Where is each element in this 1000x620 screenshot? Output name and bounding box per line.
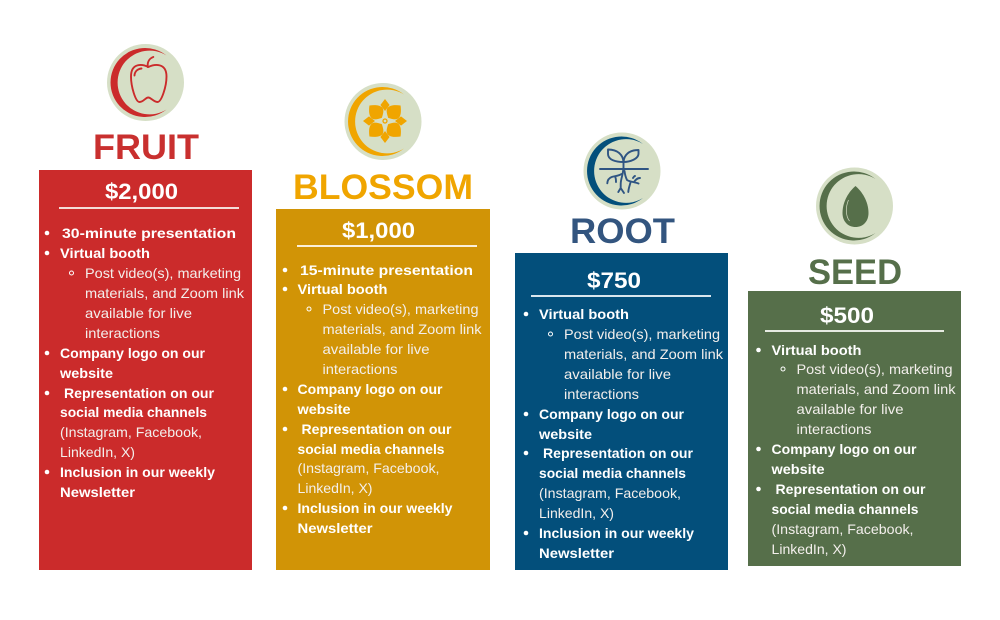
benefits list: Representation on our [543,445,694,461]
icon: root [584,132,660,210]
tier: seed [748,168,961,566]
benefits list: available for live [85,305,192,321]
price: $2,000 [105,179,178,204]
benefits list: website [770,461,825,477]
benefits list: social media channels [60,404,207,420]
benefits list: Newsletter [539,545,615,561]
benefits list: (Instagram, Facebook, [539,485,681,501]
icon: apple [107,44,184,121]
benefits list: (Instagram, Facebook, [60,424,202,440]
benefits list: materials, and Zoom link [85,285,245,301]
benefits list: Representation on our [64,385,215,401]
panel: seed [748,291,961,566]
benefits list: 15-minute presentation [300,262,473,278]
benefits list: Representation on our [302,421,452,437]
benefits list: social media channels [539,465,686,481]
benefits list: materials, and Zoom link [564,346,724,362]
icon: seed [816,168,893,244]
benefits list: Inclusion in our weekly [60,464,215,480]
benefits list [45,225,245,500]
benefits list: available for live [322,341,430,357]
benefits list: interactions [322,361,398,377]
benefits list [524,306,724,561]
benefits list: (Instagram, Facebook, [772,521,914,537]
benefits list: interactions [796,421,872,437]
benefits list: materials, and Zoom link [322,321,483,337]
tier: root [515,132,728,570]
benefits list: Post video(s), marketing [564,326,720,342]
benefits list: website [538,426,592,442]
benefits list: (Instagram, Facebook, [298,460,440,476]
benefits list: website [59,365,113,381]
tier: blossom [276,83,490,570]
panel: blossom [276,209,490,570]
benefits list: materials, and Zoom link [796,381,957,397]
benefits list: available for live [796,401,904,417]
benefits list: Company logo on our [60,345,206,361]
heading: seed: SEED [808,253,902,292]
benefits list: website [296,401,351,417]
benefits list: Newsletter [298,520,373,536]
benefits list: Newsletter [60,484,136,500]
benefits list: social media channels [772,501,919,517]
benefits list: Post video(s), marketing [796,361,952,377]
benefits list: interactions [564,386,639,402]
panel: fruit [39,170,252,570]
benefits list: Virtual booth [772,342,862,358]
benefits list: Company logo on our [539,406,685,422]
benefits list: social media channels [298,441,445,457]
icon: blossom [344,83,422,160]
benefits list [283,262,483,536]
price: $750 [587,268,641,293]
benefits list: Company logo on our [772,441,917,457]
price: $500 [820,303,874,328]
benefits list: 30-minute presentation [62,225,236,241]
benefits list: Virtual booth [539,306,629,322]
benefits list: Company logo on our [298,381,443,397]
price: $1,000 [342,218,415,243]
benefits list [756,342,957,557]
benefits list: interactions [85,325,160,341]
benefits list: Post video(s), marketing [322,301,478,317]
benefits list: available for live [564,366,671,382]
benefits list: LinkedIn, X) [298,480,372,496]
tier: fruit [39,44,252,570]
benefits list: LinkedIn, X) [60,444,135,460]
heading: root: ROOT [570,212,675,251]
benefits list: Inclusion in our weekly [539,525,694,541]
benefits list: LinkedIn, X) [539,505,614,521]
heading: fruit: FRUIT [93,128,199,167]
benefits list: LinkedIn, X) [772,541,846,557]
benefits list: Virtual booth [298,281,388,297]
heading: blossom: BLOSSOM [293,168,473,207]
panel: root [515,253,728,570]
benefits list: Inclusion in our weekly [298,500,453,516]
benefits list: Post video(s), marketing [85,265,241,281]
benefits list: Virtual booth [60,245,150,261]
benefits list: Representation on our [776,481,926,497]
